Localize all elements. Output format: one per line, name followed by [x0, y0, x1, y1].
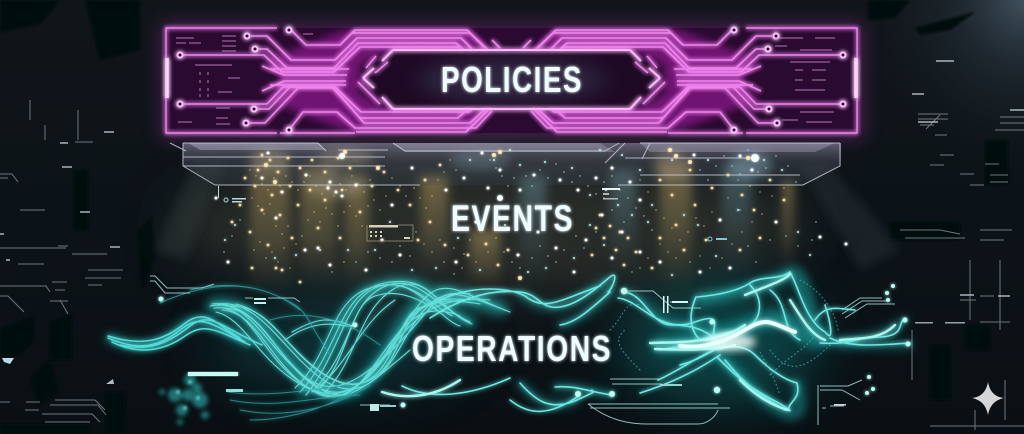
magenta glow behind traces	[265, 30, 759, 130]
panel: policies	[165, 28, 857, 133]
left strands	[108, 317, 262, 350]
heading: EVENTS: EVENTS	[451, 198, 574, 239]
broad soft ribbon glow	[110, 272, 910, 415]
main crossing strands	[210, 281, 510, 397]
circuit nodes	[178, 28, 846, 132]
ribbon cloud at lower left	[159, 374, 209, 425]
particles: events	[216, 150, 846, 282]
particle mesh around core	[610, 280, 838, 395]
small data readouts	[176, 34, 835, 124]
panel: glass layer	[170, 143, 841, 185]
middle and right strands	[402, 272, 910, 411]
inner hexagon outline	[363, 50, 512, 109]
ribbons: operations	[108, 272, 910, 420]
ambient glows	[160, 22, 865, 405]
icon: sparkle watermark	[972, 382, 1004, 415]
fine circuit strokes	[0, 100, 1024, 430]
light columns falling from the glass layer	[155, 148, 900, 295]
panel frame	[166, 28, 355, 133]
fine dust	[250, 160, 784, 272]
chart fragments in events	[218, 186, 727, 241]
glowing core	[680, 322, 795, 347]
connector traces and nodes	[150, 276, 895, 425]
circuit traces	[292, 30, 487, 49]
title: POLICIES: POLICIES	[441, 59, 583, 100]
label: OPERATIONS: OPERATIONS	[412, 328, 612, 369]
